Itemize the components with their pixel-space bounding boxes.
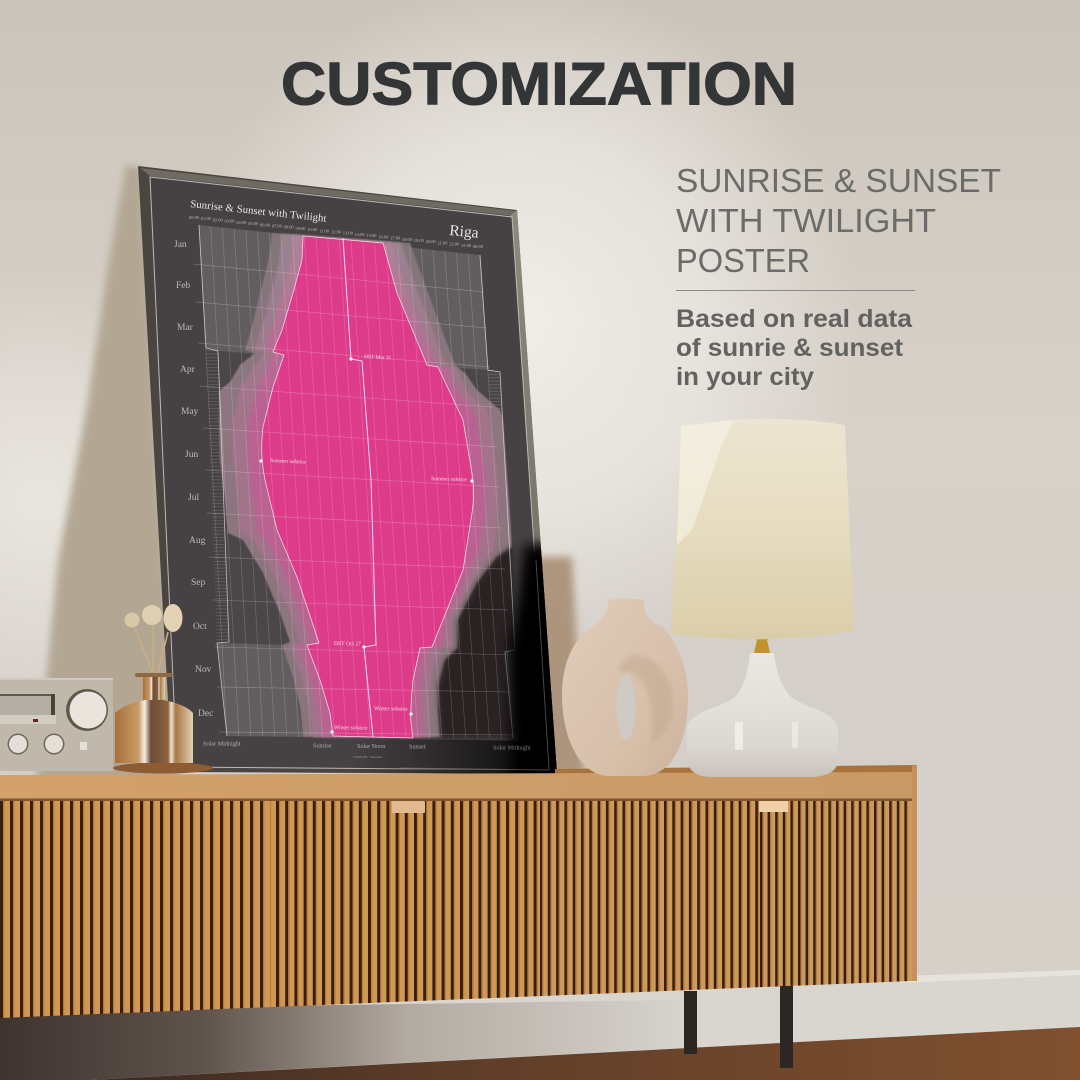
chart: winter night lighter areas bbox=[199, 225, 488, 737]
poster heading bbox=[676, 163, 1001, 280]
chart: daylight area bbox=[262, 236, 474, 738]
hour labels bbox=[189, 215, 484, 249]
hour labels: 20:00 bbox=[426, 239, 436, 244]
hour labels: 18:00 bbox=[402, 237, 413, 242]
hour labels: 05:00 bbox=[248, 221, 259, 226]
cabinet side rail bbox=[912, 765, 917, 981]
poster heading: POSTER bbox=[676, 243, 810, 280]
cabinet leg left bbox=[684, 991, 697, 1054]
hour labels: 13:00 bbox=[343, 231, 354, 236]
axis labels: Solar Noon bbox=[357, 743, 385, 750]
chart: astronomical twilight band bbox=[219, 233, 512, 737]
cabinet handle right bbox=[759, 801, 788, 812]
skirting board and floor bbox=[0, 970, 1080, 1080]
poster shadow on left wall bbox=[36, 165, 180, 785]
amplifier display bbox=[0, 694, 55, 715]
chart: event markers bbox=[259, 357, 474, 734]
vase hole bbox=[616, 674, 636, 740]
month labels: Jan bbox=[174, 240, 187, 250]
poster heading: SUNRISE & SUNSET bbox=[676, 163, 1001, 200]
chart: event labels: Summer solstice bbox=[270, 458, 307, 466]
chart: nautical twilight band bbox=[232, 234, 498, 737]
lamp base bbox=[687, 653, 838, 777]
shadow across poster bbox=[361, 536, 557, 774]
hour labels: 00:00 bbox=[189, 215, 200, 220]
axis labels: Solar Midnight bbox=[203, 740, 241, 748]
lamp shade light patch bbox=[677, 420, 733, 545]
month labels: Nov bbox=[195, 665, 212, 675]
month labels bbox=[174, 240, 213, 719]
table lamp bbox=[671, 419, 854, 777]
lamp shade bbox=[671, 419, 854, 639]
hour labels: 17:00 bbox=[390, 236, 401, 241]
poster description bbox=[676, 305, 913, 391]
poster sheet bbox=[150, 177, 549, 770]
poster description: Based on real data bbox=[676, 305, 913, 333]
chart: hour grid bbox=[199, 225, 513, 738]
cabinet handle left bbox=[392, 801, 425, 813]
chart: solar noon line bbox=[343, 238, 376, 737]
chart: shadowed night on right bbox=[438, 546, 515, 738]
hour labels: 00:00 bbox=[473, 244, 484, 249]
chart: event labels: DST Oct 27 bbox=[334, 641, 361, 647]
hour labels: 07:00 bbox=[272, 224, 283, 228]
hour labels: 14:00 bbox=[355, 232, 365, 237]
month labels: Oct bbox=[193, 622, 207, 632]
hour labels: 16:00 bbox=[378, 234, 389, 239]
poster description: of sunrie & sunset bbox=[676, 334, 904, 362]
poster title: Sunrise & Sunset with Twilight bbox=[190, 199, 327, 225]
poster shadow on right wall bbox=[535, 557, 584, 775]
framed poster bbox=[138, 166, 585, 795]
amplifier small knobs bbox=[8, 734, 87, 754]
chart: night area bbox=[199, 225, 515, 738]
chart: event labels bbox=[270, 354, 468, 732]
cabinet leg right bbox=[780, 986, 793, 1068]
month labels: Mar bbox=[177, 323, 194, 333]
vase body bbox=[115, 700, 193, 763]
poster city name: Riga bbox=[449, 222, 480, 242]
hour labels: 02:00 bbox=[213, 217, 224, 222]
hour labels: 11:00 bbox=[319, 228, 330, 233]
vase neck bbox=[143, 676, 165, 702]
month labels: Feb bbox=[176, 281, 190, 291]
amplifier bbox=[0, 678, 113, 771]
chart: civil twilight band bbox=[248, 235, 486, 737]
heading divider bbox=[676, 290, 915, 291]
axis labels: Sunset bbox=[409, 744, 426, 750]
month labels: Sep bbox=[191, 578, 206, 588]
cabinet bbox=[0, 765, 917, 1068]
chart: event labels: Winter solstice bbox=[374, 706, 408, 713]
dried stems bbox=[135, 625, 168, 672]
brass vase with dried flowers bbox=[113, 604, 213, 774]
chart: event labels: DST Mar 31 bbox=[364, 354, 392, 361]
chart: month grid bbox=[193, 264, 515, 735]
month labels: May bbox=[181, 407, 199, 417]
hour labels: 22:00 bbox=[449, 242, 460, 247]
chart: midnight lines bbox=[199, 225, 515, 738]
hour labels: 19:00 bbox=[414, 238, 425, 243]
hour labels: 10:00 bbox=[307, 227, 318, 232]
axis labels: Solar Midnight bbox=[493, 744, 531, 752]
hour labels: 15:00 bbox=[366, 233, 377, 238]
amplifier tuning knob bbox=[66, 689, 108, 731]
cabinet back tray bbox=[555, 765, 917, 778]
hour labels: 04:00 bbox=[236, 220, 247, 225]
axis labels: TWILIGHT · Sunsetlab bbox=[353, 755, 382, 759]
month labels: Apr bbox=[180, 365, 196, 375]
hour labels: 12:00 bbox=[331, 230, 342, 234]
cork coaster bbox=[113, 762, 213, 774]
hour labels: 01:00 bbox=[201, 216, 212, 221]
hour labels: 21:00 bbox=[437, 240, 448, 245]
month labels: Dec bbox=[198, 709, 213, 719]
dried flower heads bbox=[124, 604, 182, 632]
hour labels: 09:00 bbox=[296, 226, 306, 231]
axis labels bbox=[203, 740, 531, 759]
donut vase bbox=[562, 598, 688, 776]
cabinet fluted front bbox=[0, 801, 912, 1021]
hour labels: 03:00 bbox=[224, 219, 235, 224]
poster description: in your city bbox=[676, 363, 814, 391]
title: CUSTOMIZATION bbox=[281, 50, 797, 118]
axis labels: Sunrise bbox=[313, 742, 332, 750]
poster frame bbox=[138, 166, 557, 774]
poster heading: WITH TWILIGHT bbox=[676, 203, 936, 240]
month labels: Jun bbox=[185, 450, 198, 460]
month labels: Jul bbox=[188, 493, 199, 503]
chart: event labels: Summer solstice bbox=[431, 476, 468, 483]
month labels: Aug bbox=[189, 536, 206, 546]
hour labels: 08:00 bbox=[284, 225, 294, 230]
vase shadow side bbox=[618, 655, 673, 745]
hour labels: 23:00 bbox=[461, 243, 472, 248]
hour labels: 06:00 bbox=[260, 222, 271, 227]
lamp brass knob bbox=[754, 628, 770, 653]
chart: hatched midnight strips bbox=[206, 348, 515, 652]
cabinet top bbox=[0, 772, 912, 801]
chart: event labels: Winter solstice bbox=[334, 725, 368, 732]
